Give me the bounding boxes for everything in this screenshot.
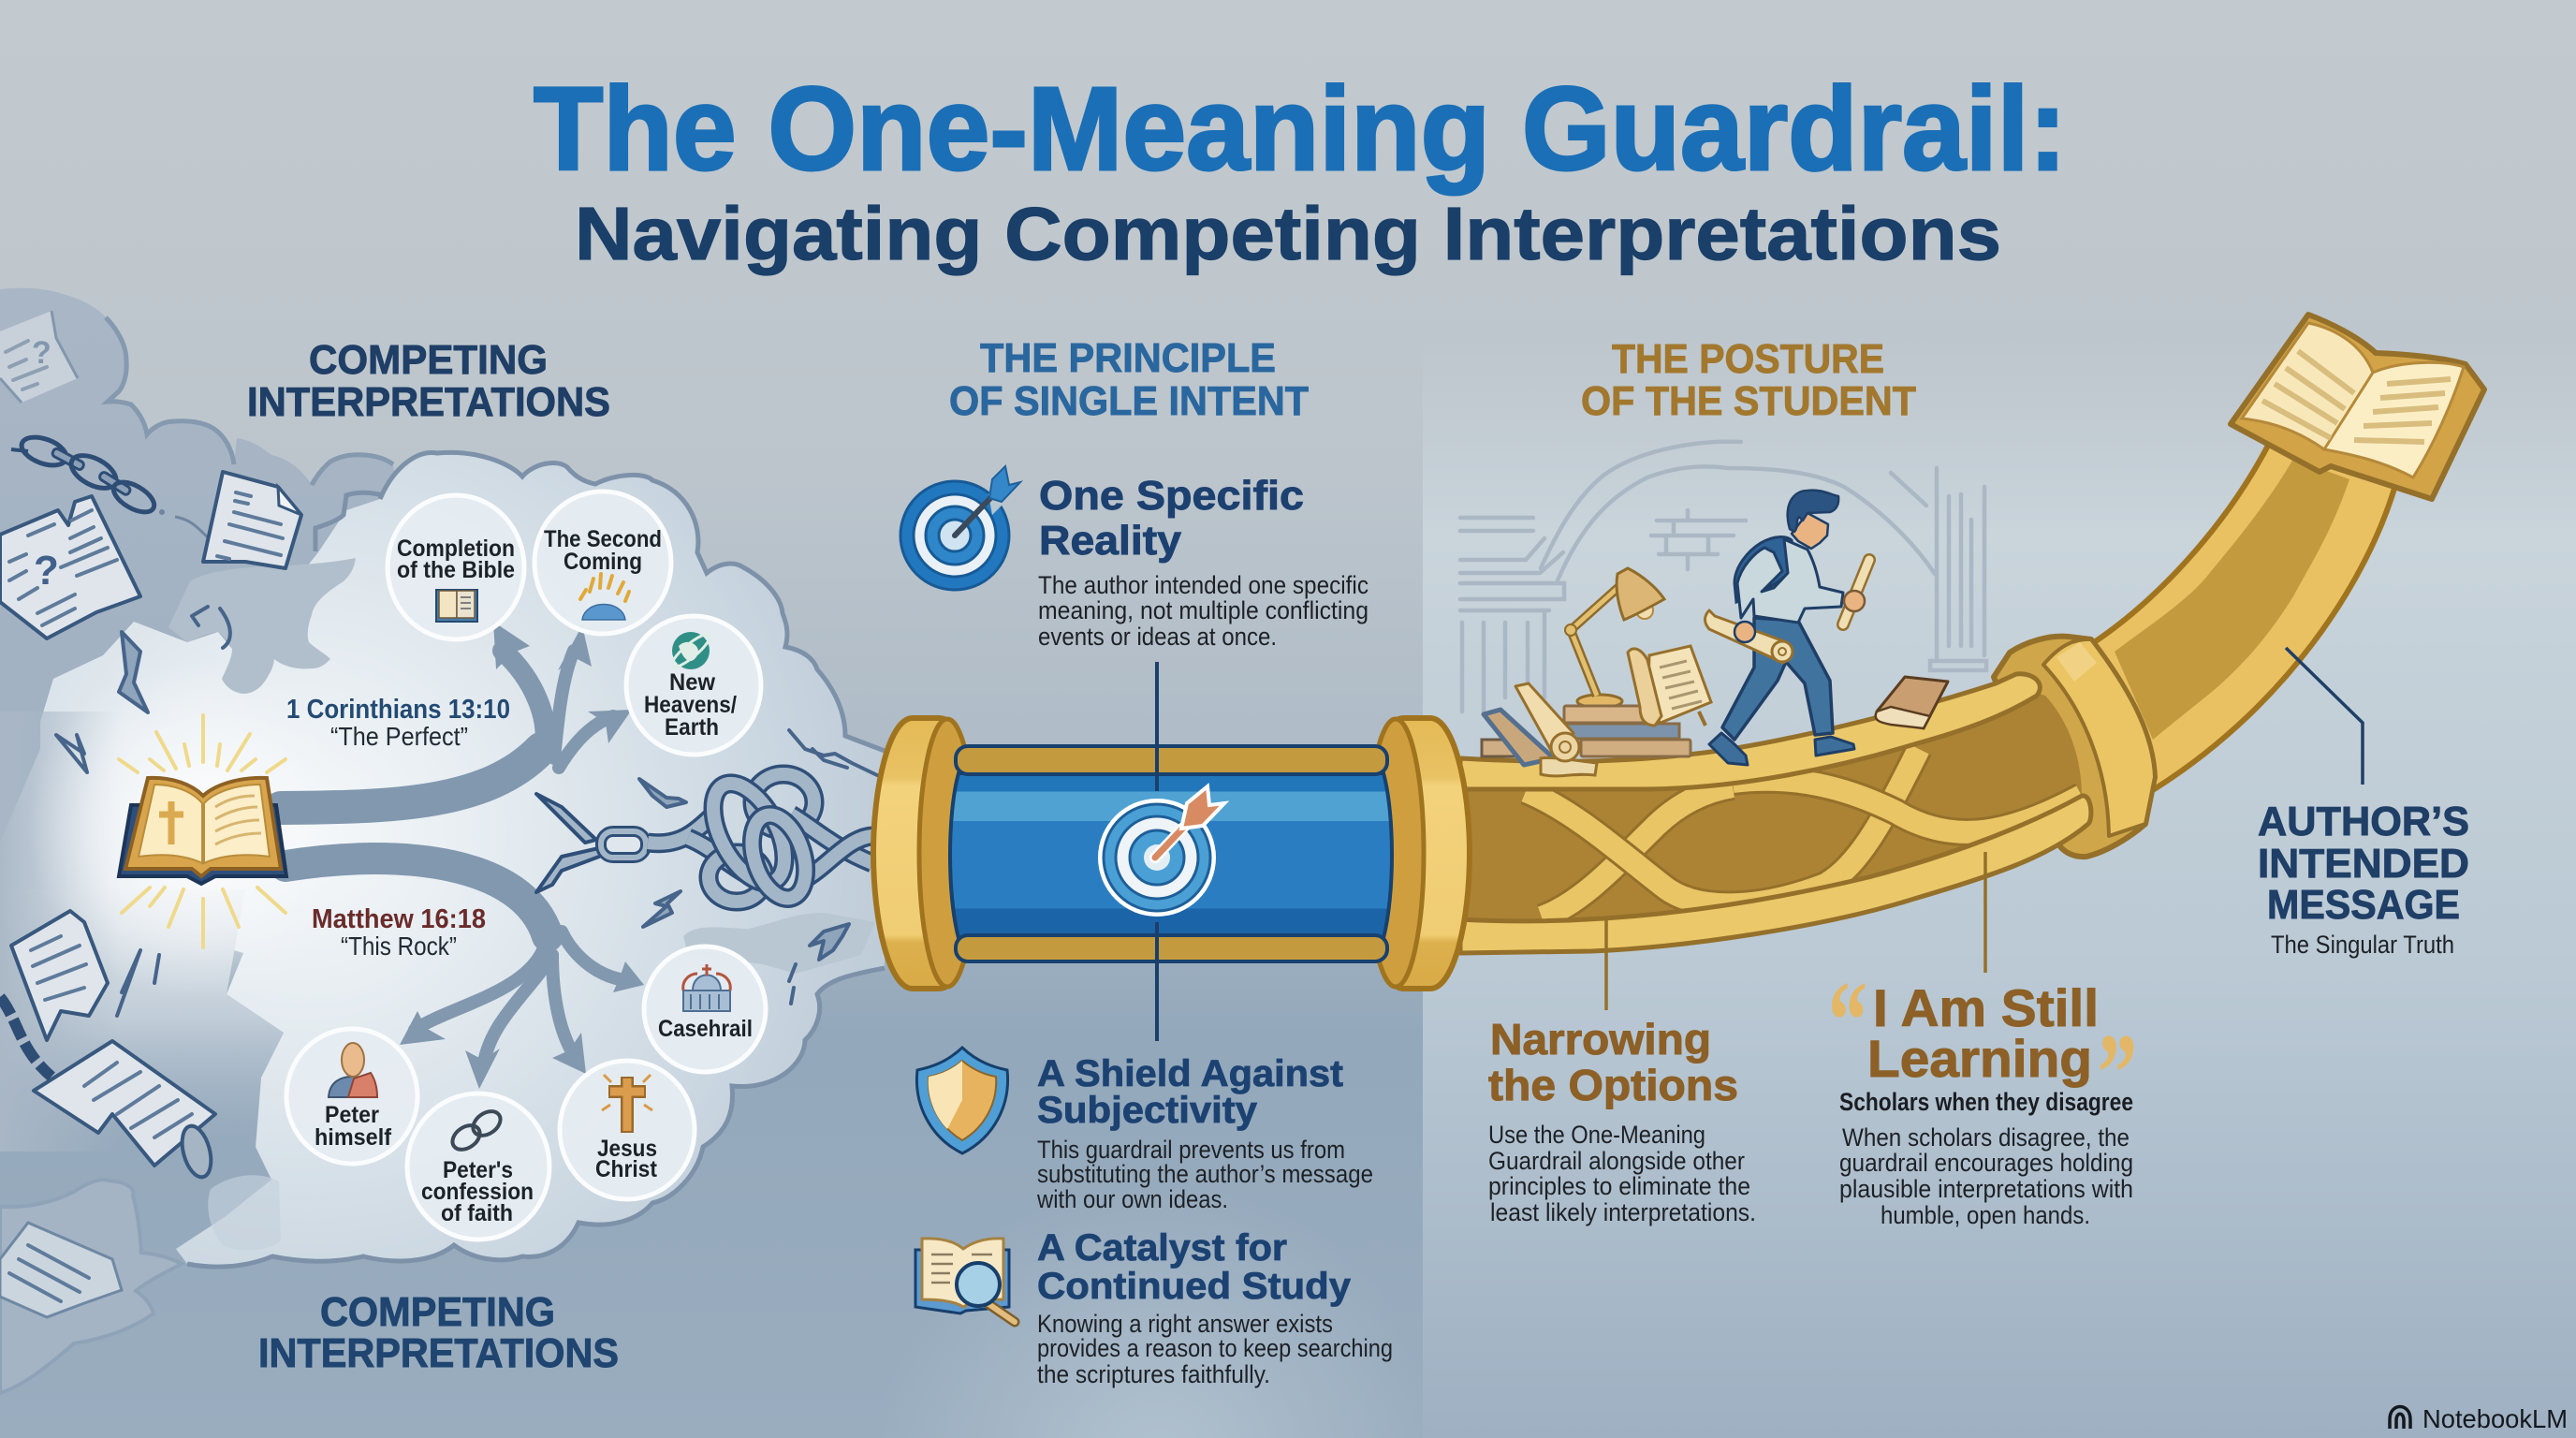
callout: author's intended message: MESSAGE <box>2267 882 2460 928</box>
student scene props <box>1482 568 1948 776</box>
text: a catalyst for continued study: the scriptures faithfully. <box>1037 1360 1270 1388</box>
text: a catalyst for continued study: provides a reason to keep searching <box>1037 1334 1393 1362</box>
blue barrel with flanges <box>873 718 1470 989</box>
title: The One-Meaning Guardrail: <box>534 63 2067 195</box>
circle: Completion of the Bible <box>388 495 524 639</box>
text: I am still learning: plausible interpretations with <box>1839 1175 2133 1203</box>
open book on stack <box>1628 646 1711 726</box>
circle: Peter's confession of faith: of faith <box>441 1200 513 1226</box>
feet <box>1709 733 1854 765</box>
icon: cathedral <box>683 964 730 1011</box>
scripture label: 1 Corinthians 13:10: 1 Corinthians 13:10 <box>286 695 510 725</box>
left flange <box>873 718 976 989</box>
text: one specific reality: meaning, not multiple conflicting <box>1038 596 1368 624</box>
text: a shield against subjectivity: Subjectivity <box>1037 1090 1258 1131</box>
scripture label: Matthew 16:18: Matthew 16:18 <box>312 904 486 934</box>
text: one specific reality: The author intended one specific <box>1038 571 1368 599</box>
icon: torn page top left <box>0 311 78 403</box>
gold bands <box>956 746 1387 774</box>
icon: torn page top left: ? <box>32 335 51 371</box>
circle: Casehrail: Casehrail <box>658 1016 753 1042</box>
text: narrowing the options: least likely interpretations. <box>1490 1198 1756 1226</box>
circle: Peter himself <box>286 1029 417 1164</box>
icon: dome with rays <box>580 574 629 620</box>
barrel target icon <box>1098 786 1224 917</box>
heading: competing interpretations top: COMPETING <box>309 337 548 383</box>
horn interior <box>1460 693 2082 923</box>
icon: shield <box>916 1048 1008 1153</box>
text: a shield against subjectivity: This guardrail prevents us from <box>1037 1136 1345 1164</box>
book on rail <box>1876 677 1948 728</box>
text: a catalyst for continued study: Knowing a right answer exists <box>1037 1310 1333 1338</box>
heading: posture of the student: THE POSTURE <box>1612 336 1884 382</box>
circle: The Second Coming <box>534 492 671 634</box>
text: one specific reality: One Specific <box>1039 473 1304 519</box>
circle: Peter's confession of faith <box>407 1093 549 1240</box>
rays <box>119 715 285 947</box>
text: I am still learning: I Am Still <box>1873 978 2099 1037</box>
panel: competing interpretations storm cloud <box>0 288 885 1393</box>
lower left cloud <box>0 1180 182 1393</box>
circle: Peter himself: Peter <box>325 1102 379 1128</box>
heading: competing interpretations bottom: INTERPRETATIONS <box>258 1330 619 1376</box>
circle: Jesus Christ <box>560 1061 695 1199</box>
title <box>534 63 2067 275</box>
logo: NotebookLM: NotebookLM <box>2422 1404 2568 1433</box>
circle: New Heavens/Earth <box>626 616 761 755</box>
circle: Casehrail <box>644 946 766 1072</box>
mid storm mass over the light <box>168 558 356 694</box>
circle: Jesus Christ: Jesus <box>597 1136 657 1162</box>
gold line to author's message <box>2286 648 2363 785</box>
text: narrowing the options: Guardrail alongside other <box>1488 1147 1745 1175</box>
text: narrowing the options: the Options <box>1488 1061 1738 1109</box>
shards and link <box>536 794 596 843</box>
outer dark cloud outline <box>106 317 393 485</box>
scroll in hand <box>1843 560 1869 624</box>
scroll under arm <box>1705 610 1792 663</box>
left fading glow <box>0 889 284 1152</box>
text: narrowing the options: Narrowing <box>1490 1015 1711 1064</box>
backpack <box>1734 537 1793 602</box>
student scene background arch <box>1460 442 1986 712</box>
scripture label: Matthew 16:18: “This Rock” <box>341 932 457 961</box>
gold horn lower section with braid <box>1460 674 2091 953</box>
text: I am still learning: humble, open hands. <box>1881 1201 2090 1229</box>
text: a catalyst for continued study: Continued Study <box>1037 1266 1352 1307</box>
circle: New Heavens/Earth: New <box>669 669 716 696</box>
top trunk <box>281 749 541 808</box>
text: narrowing the options <box>1488 1015 1756 1226</box>
circle: Peter's confession of faith: Peter's <box>443 1157 513 1183</box>
lower light patch <box>208 1175 281 1250</box>
text: a shield against subjectivity: substituting the author’s message <box>1037 1160 1373 1188</box>
text: narrowing the options: principles to eliminate the <box>1488 1172 1750 1200</box>
circle: Peter's confession of faith: confession <box>421 1179 534 1205</box>
bottom trunk <box>285 858 548 936</box>
circle: Completion of the Bible: of the Bible <box>397 557 515 583</box>
heading: competing interpretations bottom: COMPETING <box>320 1289 555 1335</box>
hair <box>1788 491 1838 532</box>
text: one specific reality: Reality <box>1039 518 1182 564</box>
text: one specific reality <box>1038 473 1368 651</box>
heading: principle of single intent: THE PRINCIPLE <box>980 335 1276 381</box>
heading: competing interpretations top <box>247 337 610 425</box>
icon: target with arrow <box>900 466 1020 590</box>
scripture label: Matthew 16:18 <box>312 904 486 961</box>
book stack <box>1564 706 1690 756</box>
icon: question page <box>0 496 140 638</box>
text: I am still learning: Learning <box>1867 1029 2092 1088</box>
icon: page lower left <box>11 911 108 1040</box>
circle: New Heavens/Earth: Earth <box>665 714 719 741</box>
callout: author's intended message: INTENDED <box>2258 841 2469 887</box>
icon: torn page with chain <box>0 997 216 1181</box>
text: a catalyst for continued study <box>1037 1227 1393 1388</box>
bottom rail <box>1460 796 2091 953</box>
scripture label: 1 Corinthians 13:10: “The Perfect” <box>330 722 468 751</box>
chain knot <box>536 772 872 905</box>
gold collar <box>1994 637 2155 857</box>
broken chain shards and bolts <box>56 607 877 1016</box>
icon: open golden book <box>2231 315 2484 499</box>
icon: Peter bust <box>329 1043 377 1097</box>
heading: principle of single intent: OF SINGLE INTENT <box>949 378 1309 424</box>
torso and arms <box>1737 539 1843 623</box>
icon: page bottom left <box>0 1223 122 1317</box>
text: a shield against subjectivity: with our own ideas. <box>1036 1185 1228 1213</box>
circle: The Second Coming: The Second <box>544 526 662 552</box>
tablet, small book and scroll <box>1482 740 1519 756</box>
cloud outline <box>315 452 885 751</box>
barrel body <box>950 773 1392 938</box>
heading: posture of the student: OF THE STUDENT <box>1581 378 1916 424</box>
gold leader lines <box>1606 852 1985 1010</box>
left side shade <box>0 712 122 1152</box>
dark storm cloud upper left <box>0 288 412 861</box>
right flange <box>1367 718 1470 989</box>
icon: question page: ? <box>34 548 59 594</box>
neck and face <box>1792 513 1828 549</box>
text: a catalyst for continued study: A Catalyst for <box>1037 1227 1287 1269</box>
leader lines to barrel <box>1155 662 1159 1041</box>
circle: The Second Coming: Coming <box>564 549 642 575</box>
circle: Peter himself: himself <box>315 1124 392 1151</box>
heading: competing interpretations top: INTERPRETATIONS <box>247 379 610 425</box>
callout: author's intended message: The Singular Truth <box>2271 931 2454 959</box>
heading: principle of single intent <box>949 335 1309 424</box>
text: one specific reality: events or ideas at once. <box>1038 623 1277 651</box>
text: I am still learning: guardrail encourages holding <box>1839 1149 2133 1177</box>
text: I am still learning: Scholars when they disagree <box>1839 1088 2133 1116</box>
icon: chain upper left <box>11 432 208 537</box>
student figure <box>1705 491 1869 765</box>
glow behind book <box>28 655 374 1002</box>
circle: Jesus Christ: Christ <box>595 1156 658 1182</box>
gold horn upper section <box>2073 440 2396 796</box>
icon: cross <box>602 1075 652 1133</box>
heading: posture of the student <box>1581 336 1916 424</box>
top rail <box>1460 674 2040 789</box>
lower right storm patch <box>683 913 875 974</box>
icon: small bible <box>436 590 477 622</box>
text: a shield against subjectivity <box>1036 1053 1373 1213</box>
circle: Completion of the Bible: Completion <box>397 536 515 562</box>
icon: book with magnifier <box>915 1239 1015 1322</box>
circle: New Heavens/Earth: Heavens/ <box>644 692 737 718</box>
text: I am still learning: “ <box>1828 958 1867 1082</box>
braided ribbons <box>1542 786 1733 917</box>
heading: competing interpretations bottom <box>258 1289 619 1376</box>
scripture label: 1 Corinthians 13:10 <box>286 695 510 751</box>
interpretation arrows <box>281 622 644 1089</box>
legs <box>1722 618 1833 740</box>
icon: page upper right of storm <box>203 472 301 568</box>
text: narrowing the options: Use the One-Meaning <box>1488 1121 1705 1149</box>
text: I am still learning: ” <box>2098 1010 2137 1135</box>
callout: author's intended message: AUTHOR’S <box>2258 799 2469 844</box>
icon: globe <box>668 630 713 671</box>
callout: author's intended message <box>2258 799 2469 959</box>
text: I am still learning: When scholars disagree, the <box>1842 1123 2130 1152</box>
text: I am still learning <box>1828 958 2137 1229</box>
title: Navigating Competing Interpretations <box>575 192 2001 275</box>
icon: chain links <box>448 1107 505 1154</box>
desk lamp <box>1565 568 1664 708</box>
light inner cloud <box>0 452 885 1267</box>
icon: glowing bible <box>119 715 286 947</box>
text: a shield against subjectivity: A Shield Against <box>1037 1053 1343 1094</box>
